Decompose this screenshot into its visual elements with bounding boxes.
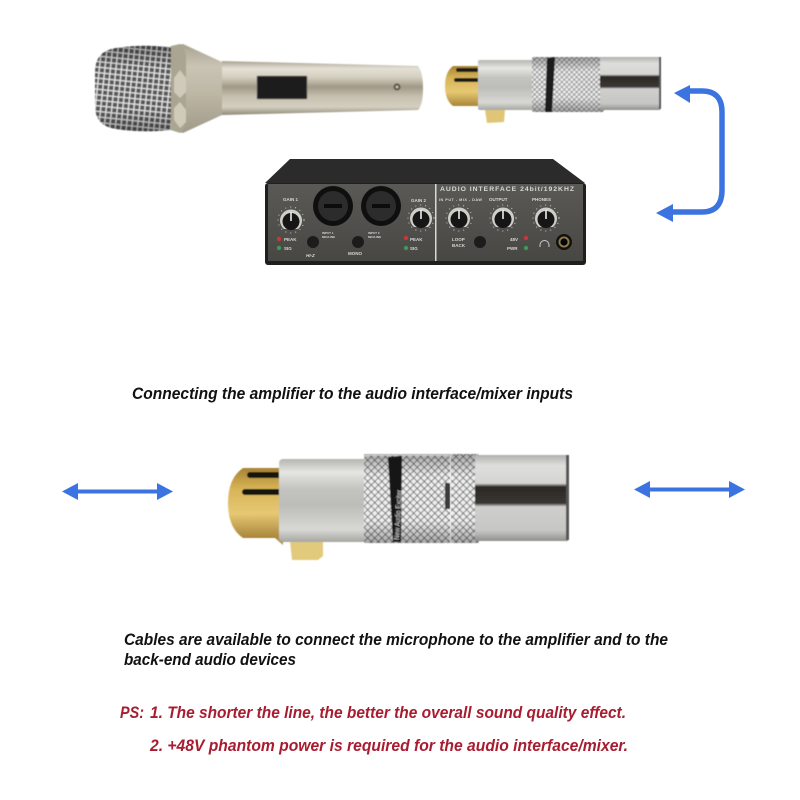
- interface labels: MONO: [348, 251, 362, 256]
- PS notes: PS:: [120, 703, 144, 722]
- band lettering: New Audio Exciter: [392, 489, 404, 540]
- input jacks: [313, 186, 401, 226]
- interface labels: PWR: [507, 246, 518, 251]
- interface labels: IN PUT - MIX - DAW: [439, 198, 482, 202]
- PS notes: 1. The shorter the line, the better the overall sound quality effect.: [150, 703, 626, 722]
- interface labels: [283, 186, 574, 258]
- interface labels: OUTPUT: [489, 197, 508, 202]
- PS notes: [120, 703, 628, 755]
- caption: amplifier connection: Connecting the amplifier to the audio interface/mixer inputs: [132, 385, 573, 403]
- interface labels: MIC/LINE: [322, 235, 335, 239]
- interface labels: PEAK: [284, 237, 297, 242]
- caption: cables: back-end audio devices: [124, 650, 296, 669]
- interface labels: HI-Z: [306, 253, 315, 258]
- buttons and LEDs: [277, 234, 572, 250]
- caption: cables: [124, 630, 668, 669]
- right double arrow: [634, 481, 745, 498]
- PS notes: 2. +48V phantom power is required for the audio interface/mixer.: [149, 736, 628, 755]
- double arrow: adapter to interface: [656, 85, 722, 222]
- interface labels: MIC/LINE: [368, 235, 381, 239]
- interface labels: 48V: [510, 237, 518, 242]
- interface labels: PHONES: [532, 197, 551, 202]
- caption: cables: Cables are available to connect the microphone to the amplifier and to the: [124, 630, 668, 649]
- interface labels: BACK: [452, 243, 466, 248]
- interface labels: GAIN 1: [283, 197, 299, 202]
- interface labels: GAIN 2: [411, 198, 427, 203]
- interface labels: SIG: [284, 246, 292, 251]
- knobs: [278, 205, 559, 233]
- interface labels: INPUT 1: [322, 231, 334, 235]
- interface labels: INPUT 2: [368, 231, 380, 235]
- microphone: [95, 44, 423, 133]
- interface labels: PEAK: [410, 237, 423, 242]
- interface labels: AUDIO INTERFACE 24bit/192KHZ: [440, 186, 574, 193]
- interface labels: SIG: [410, 246, 418, 251]
- interface labels: LOOP: [452, 237, 465, 242]
- large XLR adapter: [228, 454, 569, 560]
- small XLR adapter: [445, 57, 661, 123]
- left double arrow: [62, 483, 173, 500]
- audio interface: [265, 159, 586, 265]
